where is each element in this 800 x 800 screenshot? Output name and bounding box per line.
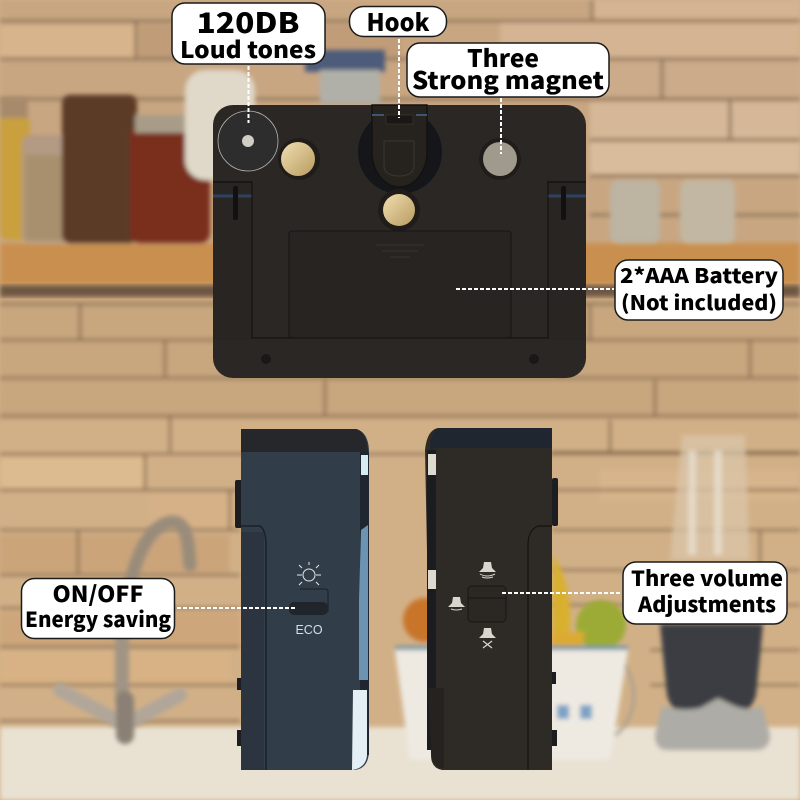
device left side view: [235, 429, 369, 770]
icon: mute bell: [479, 628, 496, 648]
device right side view: [425, 428, 558, 770]
side stand legs: [213, 182, 586, 340]
shelf: [0, 243, 800, 285]
icon: high volume bell: [479, 562, 496, 578]
callout: 120DB loud tones: 120DB: [196, 2, 300, 42]
hook recess: [358, 105, 442, 194]
fruit bowl: [395, 555, 634, 760]
callout: 120DB loud tones: [172, 2, 325, 65]
eco label: ECO: [295, 623, 323, 637]
connector lines: [177, 39, 622, 608]
callout: on/off energy saving: ON/OFF: [52, 577, 144, 609]
icon: low volume bell: [448, 597, 465, 610]
eco slider: [289, 589, 328, 615]
callout: on/off energy saving: [22, 577, 174, 638]
volume switch: [468, 586, 506, 622]
faucet: [60, 522, 190, 735]
callout: three volume adjustments: Adjustments: [637, 589, 776, 619]
callout: 120DB loud tones: Loud tones: [180, 31, 316, 65]
callout: three strong magnet: Three: [467, 39, 539, 74]
device back view: [213, 105, 586, 378]
callout: battery: [615, 260, 783, 320]
blender: [655, 435, 770, 750]
counter: [0, 727, 800, 800]
bottom screws: [261, 354, 271, 364]
magnets: [278, 138, 521, 231]
callout: three volume adjustments: Three volume: [631, 563, 783, 593]
callout: hook: [350, 3, 446, 38]
battery cover: [289, 231, 511, 338]
callout: battery: 2*AAA Battery: [620, 260, 778, 289]
callout: three volume adjustments: [623, 562, 787, 624]
callout: three strong magnet: Strong magnet: [412, 61, 604, 96]
callout: battery: (Not included): [621, 287, 777, 316]
jars on shelf: [0, 50, 735, 243]
callout: hook: Hook: [366, 3, 430, 38]
callout: three strong magnet: [407, 39, 609, 97]
icon: brightness sun: [297, 562, 321, 585]
speaker circle: [218, 111, 278, 171]
callout: on/off energy saving: Energy saving: [25, 604, 171, 634]
